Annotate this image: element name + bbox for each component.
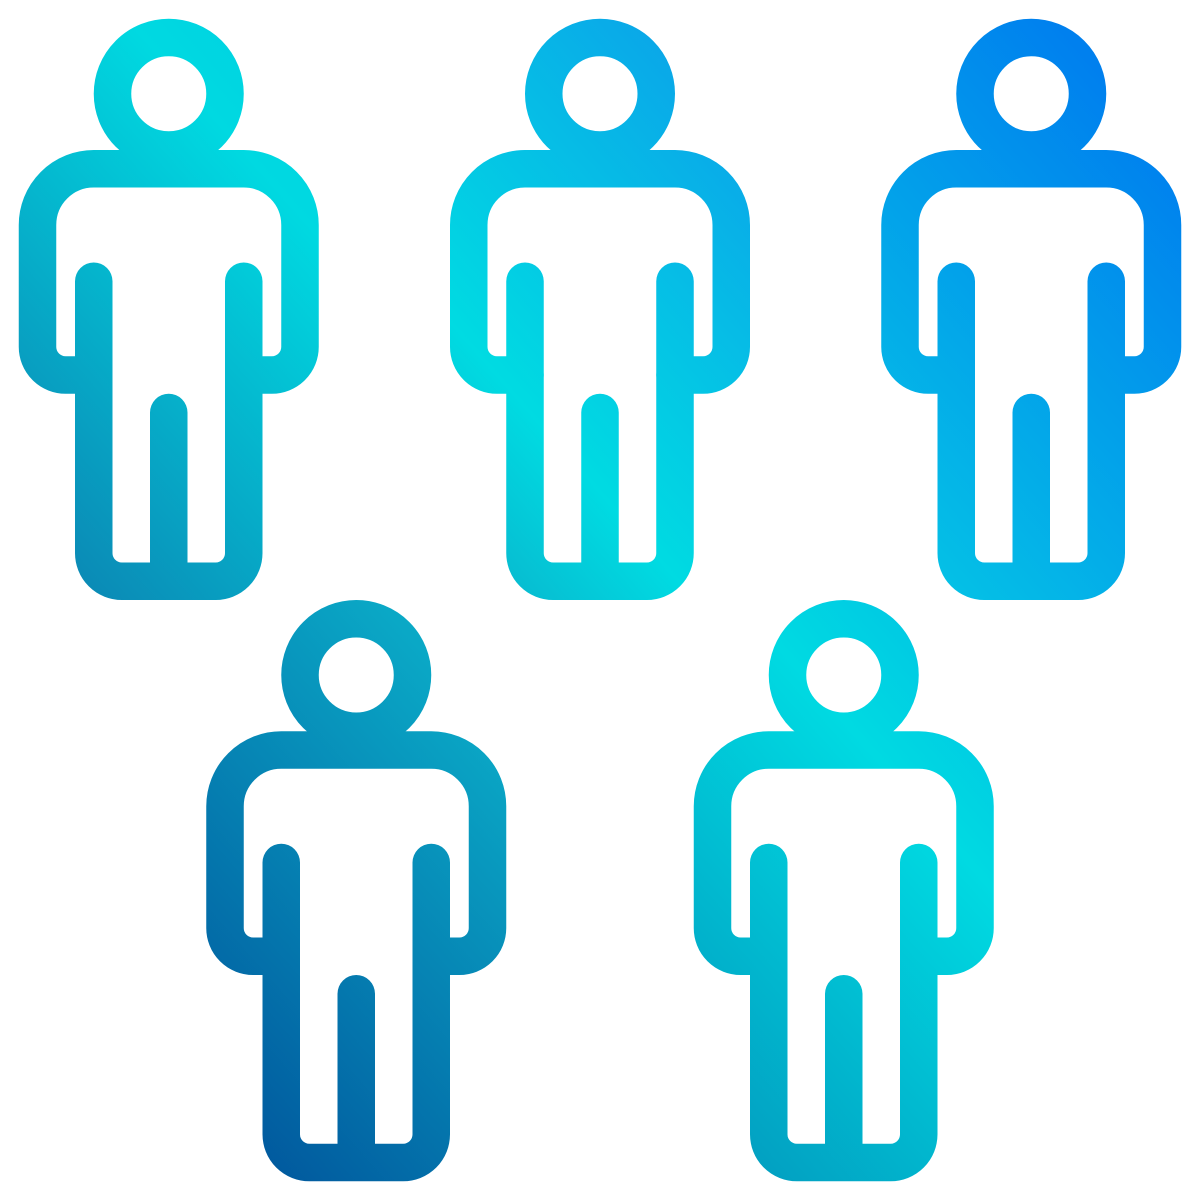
person: bottom right [712,619,975,1162]
person: top right [900,38,1162,581]
person: top left [38,38,300,581]
legs [769,862,919,1162]
torso and arms [469,169,731,375]
head [112,38,225,150]
legs [525,281,675,581]
person: top centre [469,38,731,581]
torso and arms [900,169,1162,375]
torso and arms [225,750,488,956]
legs [281,862,431,1162]
legs [94,281,244,581]
head [300,619,412,731]
person: bottom left [225,619,488,1162]
legs [956,281,1106,581]
head [788,619,900,731]
torso and arms [712,750,975,956]
torso and arms [38,169,300,375]
head [544,38,656,150]
head [975,38,1088,150]
